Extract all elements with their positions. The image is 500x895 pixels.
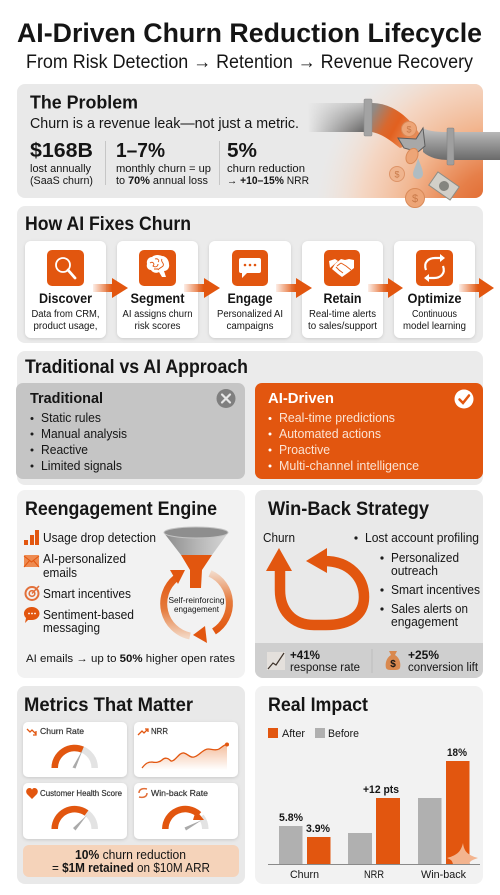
icon: x	[216, 389, 236, 408]
card: AI-driven: Proactive	[279, 443, 330, 457]
step: discover: Data from CRM,	[32, 309, 100, 320]
list item: personalized emails	[24, 552, 126, 580]
icon: trend chart	[267, 652, 285, 670]
icon: chat bubble	[239, 258, 261, 278]
heading: traditional vs AI: Traditional vs AI Approach	[25, 357, 248, 378]
icon: money bag: $	[390, 659, 396, 670]
step: engage: campaigns	[226, 321, 274, 332]
heading: metrics: Metrics That Matter	[24, 694, 193, 716]
legend: After	[282, 728, 305, 740]
card: NRR	[134, 722, 238, 777]
icon: magnifier	[56, 258, 75, 278]
gauge: win-back rate	[165, 809, 205, 830]
stat: 168B lost: (SaaS churn)	[30, 175, 93, 187]
diagram: funnel and loop: engagement	[174, 604, 220, 614]
panel: real impact	[255, 686, 483, 884]
bar chart: before vs after: Win-back	[421, 869, 466, 881]
bar chart: before vs after: 3.9%	[306, 823, 330, 835]
list item: personalized emails: emails	[43, 566, 77, 580]
icon: sync arrows	[424, 254, 445, 282]
heading: real impact: Real Impact	[268, 694, 368, 716]
list: win-back tactics: outreach	[391, 564, 438, 578]
card: traditional: Limited signals	[41, 459, 122, 473]
list: win-back tactics: Smart incentives	[391, 583, 480, 597]
legend	[268, 728, 359, 740]
stat strip: +25%	[408, 648, 439, 662]
icon: money bag	[386, 651, 400, 670]
card: churn rate: Churn Rate	[40, 726, 84, 736]
panel: how AI fixes churn	[17, 206, 483, 343]
list item: personalized emails: AI-personalized	[43, 552, 126, 566]
subtitle: From Risk Detection → Retention → Revenue Recovery	[26, 51, 473, 73]
bar chart: before vs after: NRR	[364, 869, 384, 881]
step: optimize: model learning	[403, 321, 466, 332]
problem statement: Churn is a revenue leak—not just a metric.	[30, 116, 299, 132]
panel: win-back strategy	[255, 490, 483, 678]
gauge: health score	[55, 809, 95, 830]
card: AI-driven: Automated actions	[279, 427, 381, 441]
card: traditional: Reactive	[41, 443, 88, 457]
card: churn rate	[23, 722, 127, 777]
list: win-back tactics: engagement	[391, 615, 458, 629]
step: segment	[117, 241, 198, 338]
bar chart: before vs after	[268, 747, 480, 881]
list item: sentiment messaging: messaging	[43, 621, 100, 635]
card: AI-driven: Real-time predictions	[279, 411, 395, 425]
diagram: funnel and loop: Self-reinforcing	[168, 595, 225, 605]
stat: monthly churn: 1–7%	[116, 140, 165, 162]
title: AI-Driven Churn Reduction Lifecycle	[17, 18, 482, 48]
arrow: win-back loop	[266, 548, 364, 625]
list item: smart incentives: Smart incentives	[43, 587, 131, 601]
list: win-back tactics: Sales alerts on	[391, 602, 468, 616]
list item: usage drop: Usage drop detection	[43, 531, 156, 545]
card: customer health score: Customer Health Score	[40, 788, 122, 798]
stat strip: +41%	[290, 648, 320, 662]
gauge: churn rate	[55, 748, 95, 768]
step: optimize	[394, 241, 475, 338]
card: win-back rate	[134, 783, 238, 839]
list item: sentiment messaging	[24, 607, 134, 635]
card: traditional: Static rules	[41, 411, 101, 425]
callout: retained revenue: 10% churn reduction	[75, 848, 186, 862]
stat strip: conversion lift	[408, 662, 479, 674]
card: AI-driven: Multi-channel intelligence	[279, 459, 419, 473]
illustration: leaking pipe with coins	[290, 84, 500, 208]
step: engage	[209, 241, 291, 338]
stat: monthly churn: monthly churn = up	[116, 163, 211, 175]
bar chart: before vs after: 5.8%	[279, 812, 303, 824]
legend: Before	[328, 728, 359, 740]
arrow: retain to optimize	[368, 278, 403, 298]
heading: win-back strategy: Win-Back Strategy	[268, 498, 429, 520]
panel: the problem	[17, 84, 483, 198]
callout: open rates: AI emails → up to 50% higher open rates	[26, 653, 236, 665]
callout: retained revenue: = $1M retained on $10M ARR	[52, 861, 210, 875]
chart: NRR sparkline	[142, 742, 229, 770]
illustration: leaking pipe with coins: $	[406, 124, 412, 134]
diagram: funnel and loop	[164, 527, 229, 643]
list: win-back tactics	[354, 531, 480, 629]
panel: traditional vs AI approach	[16, 351, 483, 485]
icon: brain	[147, 255, 169, 277]
stat: 168B lost: $168B	[30, 140, 93, 162]
step: discover: product usage,	[34, 321, 98, 332]
stat strip: response rate	[290, 662, 360, 674]
heading: reengagement engine: Reengagement Engine	[25, 498, 217, 520]
panel: reengagement engine	[17, 490, 245, 678]
stat: 168B lost: lost annually	[30, 163, 91, 175]
step: retain: Real-time alerts	[309, 309, 376, 320]
stat: monthly churn: to 70% annual loss	[116, 175, 208, 187]
card: AI-driven: AI-Driven	[268, 390, 334, 407]
step: optimize: Continuous	[412, 309, 457, 320]
step: engage: Personalized AI	[217, 309, 283, 320]
step: discover	[25, 241, 106, 338]
card: NRR: NRR	[151, 726, 168, 736]
list: win-back tactics: Personalized	[391, 551, 459, 565]
illustration: leaking pipe with coins: $	[394, 170, 400, 180]
stat: churn reduction: 5%	[227, 140, 257, 162]
icon: check	[454, 390, 474, 408]
stat: churn reduction	[227, 140, 309, 187]
step: retain	[302, 241, 383, 338]
bar chart: before vs after: Churn	[290, 869, 319, 881]
label: churn: Churn	[263, 531, 295, 545]
bar chart: before vs after: +12 pts	[363, 784, 399, 796]
step: optimize: Optimize	[408, 291, 462, 306]
step: engage: Engage	[228, 291, 273, 306]
stat: churn reduction: → +10–15% NRR	[227, 175, 309, 187]
stat strip	[255, 643, 483, 678]
step: segment: Segment	[130, 291, 185, 306]
panel: metrics that matter	[17, 686, 245, 884]
list: win-back tactics: Lost account profiling	[365, 531, 479, 545]
arrow: discover to segment	[93, 278, 128, 298]
arrow: engage to retain	[276, 278, 312, 298]
icon: handshake	[329, 259, 354, 277]
step: retain: Retain	[324, 291, 362, 306]
card: win-back rate: Win-back Rate	[151, 788, 208, 798]
arrow: optimize onward	[459, 278, 494, 298]
card: traditional: Manual analysis	[41, 427, 127, 441]
stat: 168B lost	[30, 140, 93, 187]
step: segment: risk scores	[134, 321, 180, 332]
bar chart: before vs after: 18%	[447, 747, 467, 759]
card: AI-driven	[255, 383, 483, 479]
step: retain: to sales/support	[308, 321, 377, 332]
card: customer health score	[23, 783, 127, 839]
list item: sentiment messaging: Sentiment-based	[43, 608, 134, 622]
card: traditional	[16, 383, 245, 479]
stat: churn reduction: churn reduction	[227, 163, 305, 175]
arrow: segment to engage	[184, 278, 220, 298]
illustration: leaking pipe with coins: $	[412, 193, 418, 205]
heading: the problem: The Problem	[30, 92, 138, 112]
stat: monthly churn	[116, 140, 211, 187]
step: discover: Discover	[39, 291, 93, 306]
card: traditional: Traditional	[30, 390, 103, 407]
callout: retained revenue	[23, 845, 239, 877]
step: segment: AI assigns churn	[122, 309, 192, 320]
heading: how AI fixes churn: How AI Fixes Churn	[25, 213, 191, 235]
